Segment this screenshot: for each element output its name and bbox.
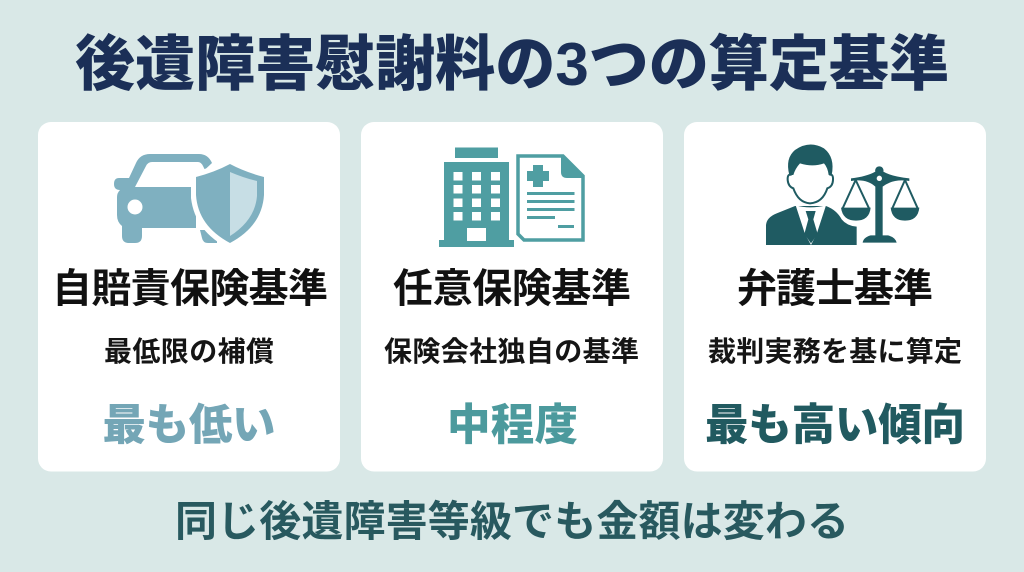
rating: 最も高い傾向 [705,402,965,450]
icon: lawyer and scales [766,145,919,245]
rating: 最も低い [102,402,276,450]
icon: hospital and medical document [439,148,583,247]
rating: 中程度 [447,402,578,450]
heading: 自賠責保険基準 [52,267,328,311]
panel: 弁護士基準 [684,122,986,472]
title: 後遺障害慰謝料の3つの算定基準 [75,31,949,98]
heading: 弁護士基準 [737,267,933,311]
text block: 裁判実務を基に算定 [708,336,962,367]
text block: 最低限の補償 [104,336,274,367]
text block: 保険会社独自の基準 [384,336,639,367]
panel: 任意保険基準 [361,122,663,472]
footer text: 同じ後遺障害等級でも金額は変わる [175,498,849,545]
panel: 自賠責保険基準 [38,122,340,472]
icon: car and shield [114,154,269,249]
heading: 任意保険基準 [393,267,631,311]
